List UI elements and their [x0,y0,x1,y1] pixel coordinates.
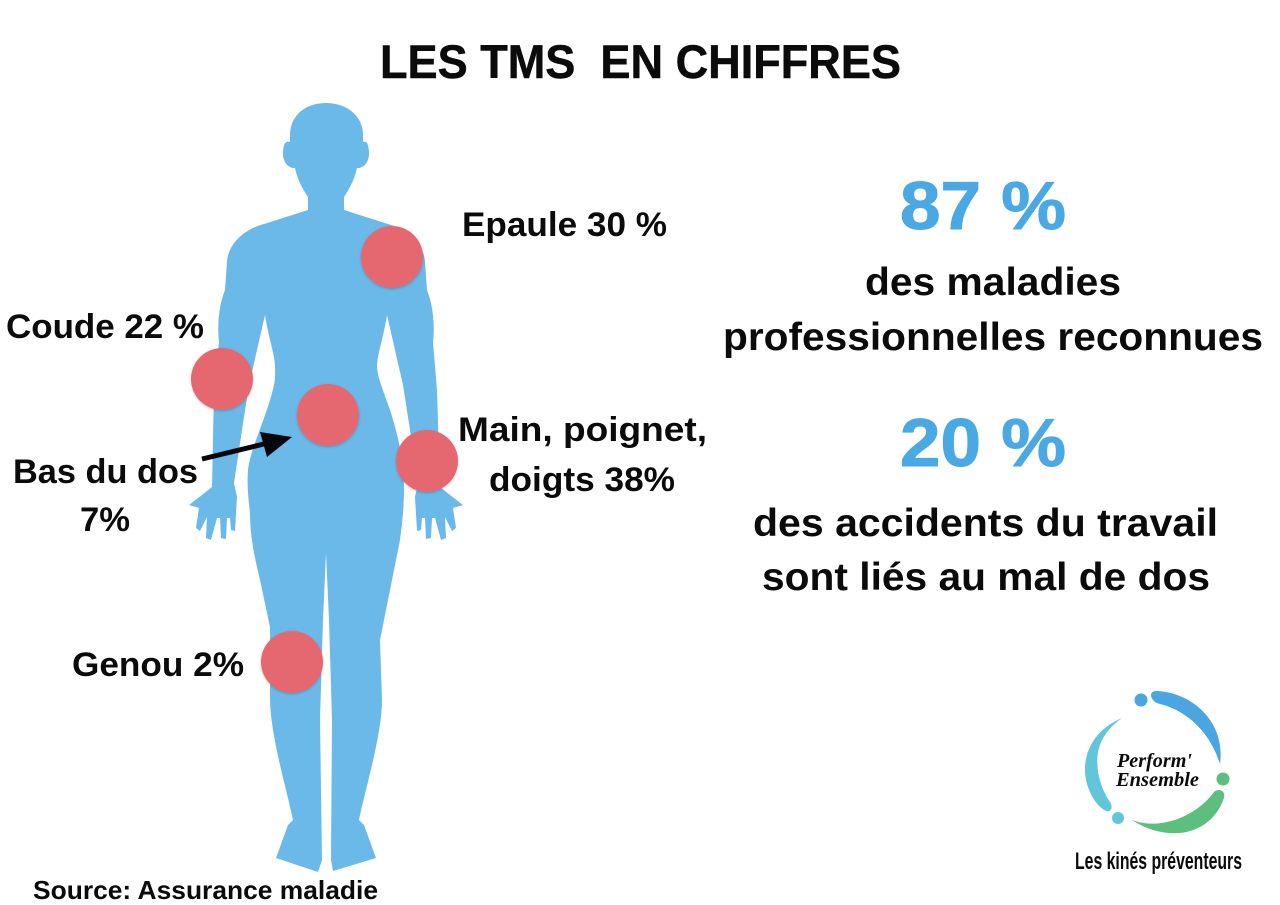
marker: shoulder [361,226,423,288]
label: lower back: Bas du dos [13,453,198,491]
logo teal dot [1112,812,1124,824]
label: lower back [13,453,198,539]
statistic: 20 percent: sont liés au mal de dos [762,556,1210,599]
marker: elbow [191,348,253,410]
label: lower back: 7% [80,501,130,539]
marker: lower back [297,384,359,446]
statistic: 20 percent [753,405,1218,599]
label: hand, wrist, fingers: Main, poignet, [458,411,707,449]
logo script wordmark: Perform' [1116,750,1192,772]
arrow: lower back [202,432,292,459]
statistic: 87 percent [723,168,1263,359]
statistic: 87 percent: professionnelles reconnues [723,316,1263,359]
label: elbow: Coude 22 % [6,308,204,346]
logo green arc [1132,790,1224,833]
label: hand, wrist, fingers [458,411,707,499]
logo blue arc [1151,691,1221,764]
statistic: 87 percent: des maladies [865,261,1121,304]
statistic: 87 percent: 87 % [900,168,1066,244]
logo green dot [1216,772,1230,786]
statistic: 20 percent: des accidents du travail [753,502,1218,545]
logo blue dot [1134,694,1148,706]
body silhouette [189,103,463,872]
logo teal arc [1085,718,1122,811]
logo: Perform' Ensemble [1075,691,1242,875]
statistic: 20 percent: 20 % [900,405,1066,481]
marker: hand and wrist [396,430,458,492]
source note: Source: Assurance maladie [33,875,378,905]
logo: Perform' Ensemble: Ensemble [1115,769,1199,791]
label: hand, wrist, fingers: doigts 38% [489,461,675,499]
label: knee: Genou 2% [72,646,244,684]
marker: knee [261,631,323,693]
label: shoulder: Epaule 30 % [462,206,667,244]
title: LES TMS EN CHIFFRES [380,35,901,88]
